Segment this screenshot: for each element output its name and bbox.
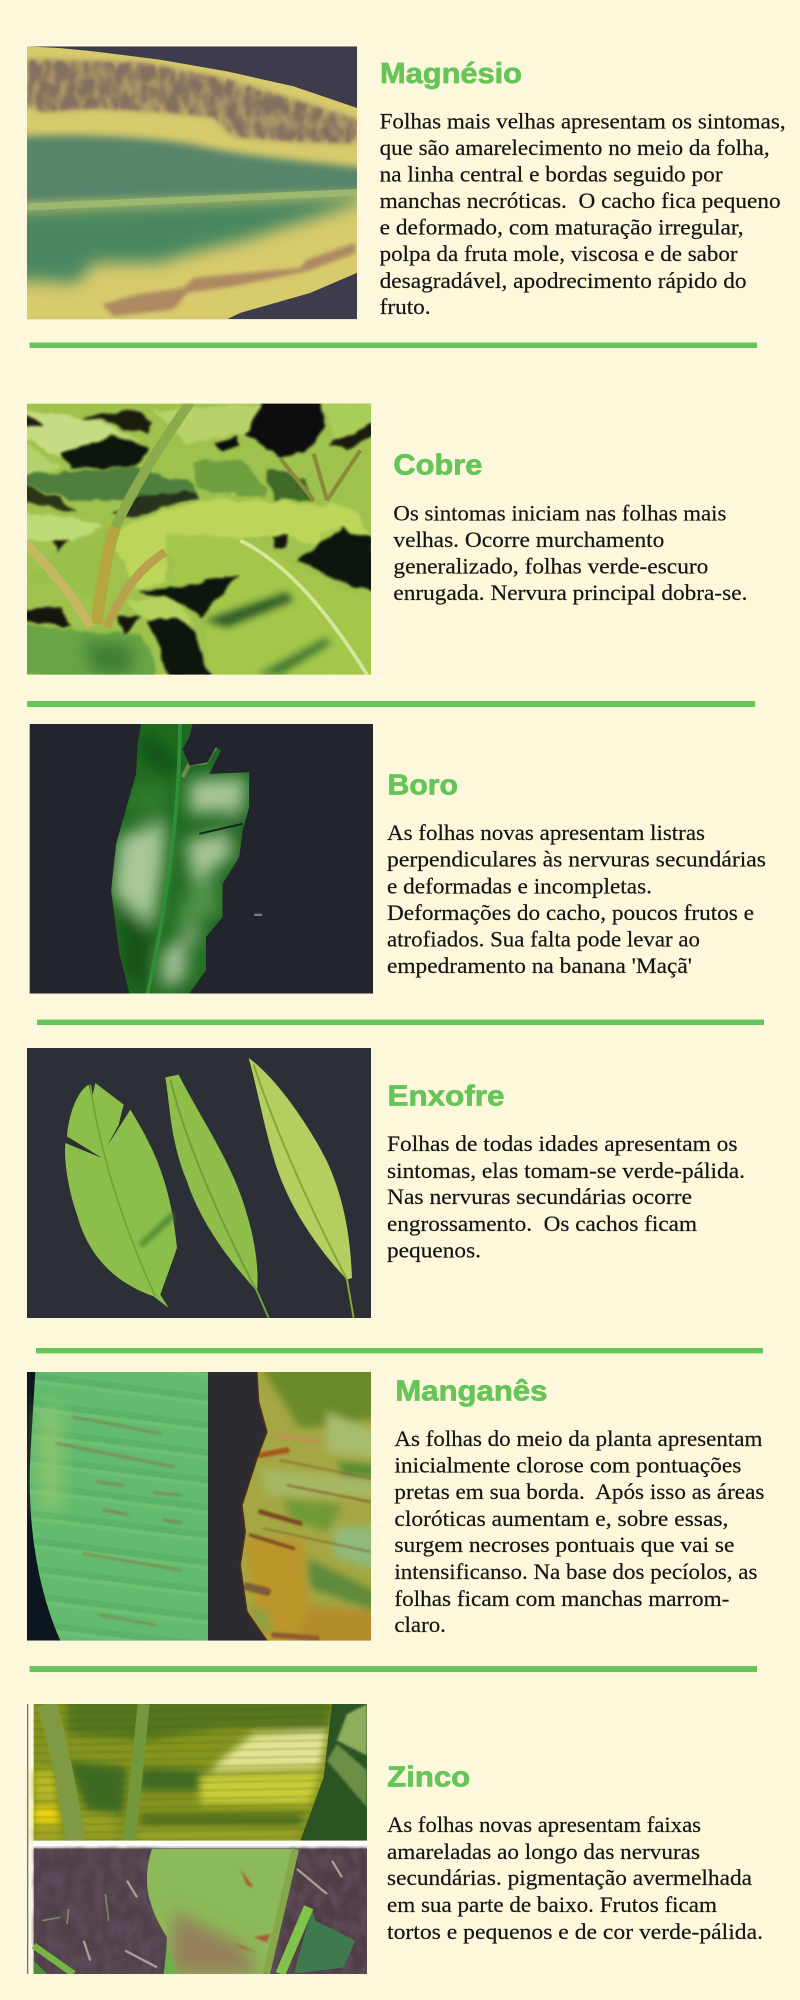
- body text: [387, 1131, 745, 1263]
- panel: Cobre: [24, 400, 747, 677]
- body text: enrugada. Nervura principal dobra-se.: [393, 580, 747, 605]
- body text: polpa da fruta mole, viscosa e de sabor: [380, 241, 738, 266]
- body text: folhas ficam com manchas marrom-: [394, 1586, 729, 1611]
- body text: empedramento na banana 'Maçã': [387, 953, 692, 978]
- body text: tortos e pequenos e de cor verde-pálida.: [387, 1919, 763, 1944]
- body text: e deformadas e incompletas.: [387, 873, 652, 898]
- photo: boron deficient leaf: [30, 724, 373, 994]
- body text: que são amarelecimento no meio da folha,: [380, 135, 770, 160]
- body text: Deformações do cacho, poucos frutos e: [387, 900, 754, 925]
- heading: Manganês: [395, 1376, 547, 1408]
- body text: fruto.: [380, 294, 431, 319]
- body text: Folhas de todas idades apresentam os: [387, 1131, 738, 1156]
- body text: pretas em sua borda. Após isso as áreas: [394, 1479, 764, 1504]
- body text: amareladas ao longo das nervuras: [387, 1839, 700, 1864]
- body text: As folhas do meio da planta apresentam: [394, 1426, 762, 1451]
- body text: As folhas novas apresentam listras: [387, 820, 705, 845]
- body text: generalizado, folhas verde-escuro: [393, 554, 708, 578]
- body text: manchas necróticas. O cacho fica pequeno: [380, 188, 781, 213]
- heading: Boro: [388, 770, 458, 802]
- photo: copper deficient plant: [27, 404, 371, 675]
- panel: Enxofre: [27, 1048, 745, 1318]
- body text: claro.: [394, 1612, 446, 1637]
- body text: As folhas novas apresentam faixas: [387, 1812, 701, 1837]
- body text: intensificanso. Na base dos pecíolos, as: [394, 1559, 757, 1584]
- body text: Os sintomas iniciam nas folhas mais: [393, 500, 726, 526]
- heading: Enxofre: [388, 1080, 504, 1112]
- panel: Zinco: [27, 1697, 763, 1974]
- heading: Cobre: [393, 450, 482, 482]
- photo: sulfur deficient leaves: [27, 1048, 371, 1318]
- body text: perpendiculares às nervuras secundárias: [387, 847, 766, 872]
- body text: engrossamento. Os cachos ficam: [387, 1211, 697, 1236]
- body text: [394, 1426, 764, 1637]
- body text: [380, 109, 786, 319]
- panel: Manganês: [27, 1365, 764, 1645]
- body text: inicialmente clorose com pontuações: [394, 1453, 741, 1478]
- photo: manganese deficient leaves: [27, 1372, 371, 1641]
- body text: e deformado, com maturação irregular,: [380, 214, 744, 240]
- body text: [387, 1812, 763, 1944]
- body text: desagradável, apodrecimento rápido do: [380, 268, 747, 293]
- body text: Folhas mais velhas apresentam os sintomas,: [380, 109, 786, 134]
- body text: sintomas, elas tomam-se verde-pálida.: [387, 1158, 745, 1183]
- body text: [393, 500, 747, 605]
- body text: [387, 820, 766, 978]
- photo: magnesium deficient leaf: [27, 46, 357, 320]
- body text: cloróticas aumentam e, sobre essas,: [394, 1506, 728, 1531]
- body text: pequenos.: [387, 1238, 481, 1263]
- body text: velhas. Ocorre murchamento: [393, 527, 664, 552]
- panel: Magnésio: [7, 46, 786, 319]
- body text: atrofiados. Sua falta pode levar ao: [387, 927, 700, 952]
- photo: zinc deficient leaves: [27, 1704, 367, 1974]
- panel: Boro: [30, 724, 766, 994]
- heading: Zinco: [387, 1762, 470, 1794]
- body text: Nas nervuras secundárias ocorre: [387, 1184, 692, 1209]
- body text: em sua parte de baixo. Frutos ficam: [387, 1892, 717, 1917]
- body text: surgem necroses pontuais que vai se: [394, 1532, 734, 1557]
- body text: secundárias. pigmentação avermelhada: [387, 1865, 752, 1890]
- heading: Magnésio: [380, 58, 522, 90]
- body text: na linha central e bordas seguido por: [380, 162, 723, 186]
